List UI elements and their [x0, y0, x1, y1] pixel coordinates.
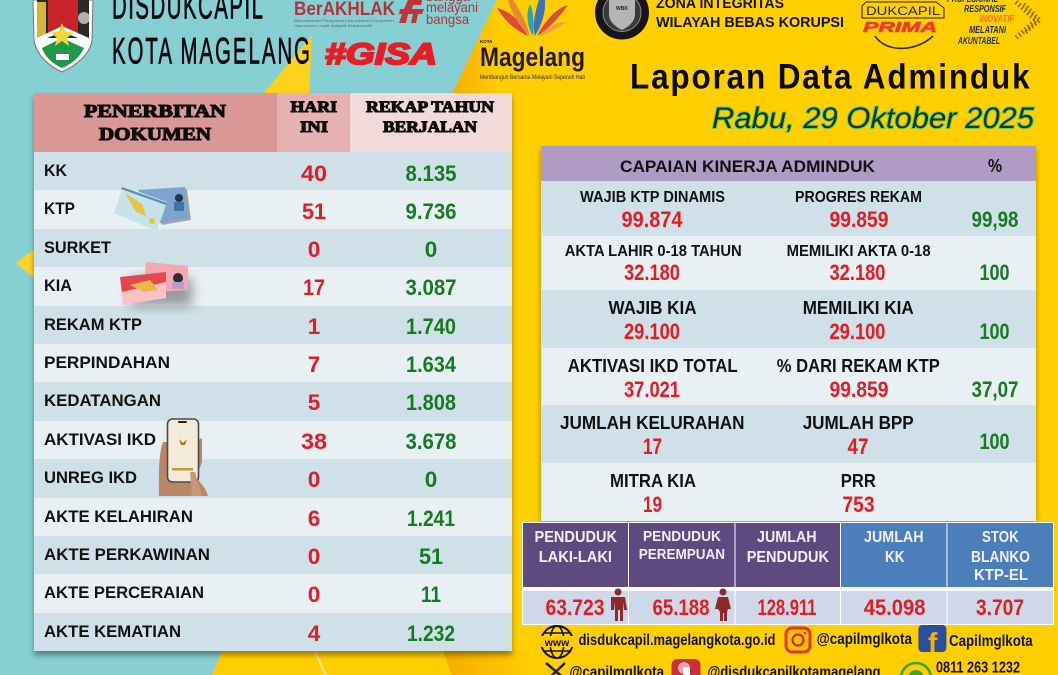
- row: KEDATANGAN: KEDATANGAN: [44, 391, 161, 410]
- logo: service values: INOVATIF: [980, 13, 1014, 25]
- row: KK: KK: [44, 161, 68, 180]
- column: jumlah penduduk: JUMLAH: [757, 529, 817, 546]
- row: AKTE PERKAWINAN: AKTE PERKAWINAN: [44, 545, 210, 564]
- row: aktivasi IKD total: % DARI REKAM KTP: [777, 356, 940, 376]
- row: KTP: 9.736: [406, 199, 456, 224]
- row: aktivasi IKD total: 37,07: [972, 377, 1018, 402]
- logo: Magelang: KOTA: [480, 39, 493, 44]
- row: PERPINDAHAN: 1.634: [406, 352, 456, 377]
- table header: BERJALAN: [383, 119, 477, 136]
- logo: city crest: [33, 0, 93, 72]
- icon: phone in hand: [159, 419, 208, 496]
- column: stok blanko: BLANKO: [971, 549, 1030, 566]
- row: aktivasi IKD total: 37.021: [624, 377, 680, 402]
- column: jumlah penduduk: 128.911: [758, 595, 816, 620]
- row: mitra KIA and PRR: [541, 463, 1036, 521]
- row: AKTIVASI IKD: 3.678: [406, 429, 456, 454]
- row: KIA: 17: [303, 275, 325, 300]
- row: KIA: KIA: [44, 276, 72, 295]
- row: aktivasi IKD total: AKTIVASI IKD TOTAL: [568, 356, 738, 376]
- column: jumlah penduduk: PENDUDUK: [747, 549, 829, 566]
- row: kelurahan and BPP: 47: [848, 434, 868, 459]
- row: PERPINDAHAN: 7: [308, 352, 320, 377]
- row: AKTE KELAHIRAN: [34, 498, 512, 536]
- column: penduduk laki-laki: [523, 523, 628, 624]
- row: KK: [34, 152, 512, 190]
- row: AKTIVASI IKD: AKTIVASI IKD: [44, 430, 156, 449]
- row: AKTE PERKAWINAN: [34, 536, 512, 574]
- row: KTP: KTP: [44, 199, 75, 218]
- row: kelurahan and BPP: 100: [980, 429, 1010, 454]
- row: KTP dinamis: WAJIB KTP DINAMIS: [580, 189, 725, 206]
- logo: Dukcapil Prima: [862, 2, 944, 48]
- row: KTP dinamis: 99,98: [972, 207, 1018, 232]
- row: AKTE KELAHIRAN: AKTE KELAHIRAN: [44, 507, 193, 526]
- logo: service values: [947, 0, 1040, 47]
- title: Laporan Data Adminduk: [630, 58, 1030, 97]
- text: Zona Integritas: WILAYAH BEBAS KORUPSI: [656, 14, 844, 31]
- panel header: %: [988, 156, 1002, 176]
- row: AKTE PERCERAIAN: [34, 574, 512, 613]
- row: AKTE KEMATIAN: 1.232: [407, 621, 455, 646]
- text: Zona Integritas: [656, 0, 844, 31]
- row: AKTE PERKAWINAN: 0: [308, 544, 320, 569]
- column: penduduk laki-laki: PENDUDUK: [534, 529, 617, 546]
- row: AKTIVASI IKD: 38: [301, 429, 327, 454]
- row: UNREG IKD: UNREG IKD: [44, 468, 137, 487]
- logo: bangga melayani bangsa: [399, 0, 478, 27]
- text: instagram handle: @capilmglkota: [817, 631, 912, 648]
- icon: whatsapp: [901, 663, 931, 675]
- row: UNREG IKD: [34, 459, 512, 498]
- row: REKAM KTP: 1: [308, 314, 320, 339]
- logo: service values: MELATANI: [969, 24, 1007, 36]
- row: KTP dinamis: 99.859: [830, 207, 888, 232]
- logo: Zona Integritas badge: [595, 0, 649, 40]
- row: KTP: 51: [302, 199, 326, 224]
- row: mitra KIA and PRR: MITRA KIA: [610, 471, 696, 491]
- column: jumlah KK: 45.098: [864, 595, 925, 620]
- column: stok blanko: [948, 523, 1053, 624]
- icon: facebook: f: [928, 627, 938, 658]
- icon: female: [715, 588, 731, 621]
- logo: Zona Integritas badge: WBK: [616, 6, 628, 12]
- row: KIA: MEMILIKI KIA: [803, 298, 914, 318]
- row: akta lahir: 32.180: [624, 260, 680, 285]
- column: stok blanko: KTP-EL: [974, 567, 1028, 584]
- row: KTP: [34, 190, 512, 229]
- icon: instagram: [786, 628, 810, 652]
- table header: REKAP TAHUN: [366, 99, 494, 116]
- panel header: CAPAIAN KINERJA ADMINDUK: [620, 157, 876, 176]
- row: mitra KIA and PRR: 19: [643, 492, 662, 517]
- row: AKTE KEMATIAN: AKTE KEMATIAN: [44, 622, 181, 641]
- logo: BerAKHLAK: Harmonis Loyal Adaptif Kolaboratif: [294, 23, 373, 28]
- icon: male: [611, 588, 627, 621]
- row: akta lahir: MEMILIKI AKTA 0-18: [787, 243, 931, 260]
- panel: capaian kinerja adminduk: [541, 146, 1036, 522]
- column: jumlah KK: [841, 523, 946, 624]
- row: KEDATANGAN: 5: [308, 390, 320, 415]
- table header: HARI: [290, 99, 337, 116]
- row: REKAM KTP: 1.740: [406, 314, 456, 339]
- logo: #GISA: #GISA: [325, 38, 437, 71]
- row: SURKET: [34, 229, 512, 267]
- row: akta lahir: [541, 236, 1036, 290]
- row: kelurahan and BPP: JUMLAH KELURAHAN: [560, 413, 744, 433]
- heading: agency name: [112, 0, 310, 72]
- row: KK: 8.135: [406, 161, 456, 186]
- row: mitra KIA and PRR: PRR: [841, 471, 876, 491]
- row: KIA: 100: [980, 319, 1010, 344]
- row: AKTE PERCERAIAN: 11: [421, 582, 441, 607]
- icon: facebook: [918, 625, 946, 658]
- column: penduduk perempuan: [629, 523, 734, 624]
- table header: INI: [300, 119, 328, 136]
- logo: Dukcapil Prima: DUKCAPIL: [866, 4, 940, 18]
- row: mitra KIA and PRR: 753: [842, 492, 874, 517]
- row: AKTE KELAHIRAN: 1.241: [407, 506, 455, 531]
- column: penduduk perempuan: PEREMPUAN: [639, 546, 725, 563]
- column: penduduk perempuan: 65.188: [652, 595, 710, 620]
- column: stok blanko: STOK: [982, 529, 1019, 546]
- row: PERPINDAHAN: PERPINDAHAN: [44, 353, 170, 372]
- row: KIA: 29.100: [624, 319, 680, 344]
- column: jumlah penduduk: [736, 523, 840, 624]
- row: KEDATANGAN: [34, 382, 512, 421]
- row: AKTE KEMATIAN: 4: [308, 621, 321, 646]
- row: AKTE PERCERAIAN: 0: [308, 582, 320, 607]
- logo: BerAKHLAK: Berorientasi Pelayanan Akuntabel Kompeten: [294, 18, 394, 23]
- logo: Dukcapil Prima: PRIMA: [863, 19, 937, 36]
- text: facebook page: Capilmglkota: [949, 633, 1033, 650]
- panel: penerbitan dokumen table: [34, 93, 512, 655]
- icon: globe: www: [544, 637, 570, 649]
- row: KK: 40: [301, 161, 327, 186]
- row: AKTE PERKAWINAN: 51: [419, 544, 443, 569]
- icon: KTP cards: [114, 186, 191, 231]
- logo: bangga melayani bangsa: bangsa: [426, 11, 469, 27]
- panel header: [541, 146, 1036, 181]
- date: Rabu, 29 Oktober 2025: [712, 102, 1034, 135]
- row: KEDATANGAN: 1.808: [406, 390, 456, 415]
- heading: agency name: KOTA MAGELANG: [112, 31, 310, 72]
- row: SURKET: 0: [308, 237, 320, 262]
- row: SURKET: 0: [425, 237, 437, 262]
- text: website: disdukcapil.magelangkota.go.id: [578, 632, 776, 649]
- column: jumlah KK: KK: [885, 549, 905, 566]
- row: KTP dinamis: 99.874: [622, 207, 683, 232]
- row: AKTE PERCERAIAN: AKTE PERCERAIAN: [44, 583, 204, 602]
- row: KIA: WAJIB KIA: [608, 298, 696, 318]
- icon: globe: [540, 626, 574, 658]
- row: REKAM KTP: REKAM KTP: [44, 315, 142, 334]
- table header: PENERBITAN: [84, 101, 226, 121]
- column: penduduk laki-laki: LAKI-LAKI: [539, 549, 612, 566]
- footer: contact links: [540, 625, 1033, 675]
- panel: population summary: [522, 522, 1054, 625]
- row: aktivasi IKD total: [541, 348, 1036, 405]
- row: KTP dinamis: [541, 181, 1036, 236]
- row: AKTE KELAHIRAN: 6: [308, 506, 320, 531]
- logo: service values: AKUNTABEL: [957, 35, 1000, 47]
- logo: BerAKHLAK: [294, 0, 395, 28]
- row: REKAM KTP: [34, 306, 512, 344]
- table header: [34, 93, 512, 152]
- row: akta lahir: 100: [980, 260, 1010, 285]
- row: KIA: [34, 267, 512, 306]
- row: akta lahir: 32.180: [830, 260, 886, 285]
- icon: X: [546, 663, 566, 675]
- row: KTP dinamis: PROGRES REKAM: [795, 189, 922, 206]
- row: aktivasi IKD total: 99.859: [830, 377, 888, 402]
- table header: DOKUMEN: [99, 124, 211, 144]
- logo: Magelang: Magelang: [480, 42, 585, 72]
- logo: Magelang: Membangun Bersama Melayani Sepenuh Hati: [480, 75, 585, 81]
- row: kelurahan and BPP: 17: [643, 434, 662, 459]
- row: UNREG IKD: 0: [425, 467, 437, 492]
- icon: KIA cards: [120, 262, 192, 306]
- column: stok blanko: 3.707: [976, 595, 1024, 620]
- row: SURKET: SURKET: [44, 238, 112, 257]
- row: PERPINDAHAN: [34, 344, 512, 382]
- row: AKTIVASI IKD: [34, 421, 512, 459]
- row: kelurahan and BPP: [541, 405, 1036, 463]
- row: KIA: 29.100: [830, 319, 886, 344]
- icon: instagram style badge: [672, 659, 700, 675]
- logo: Magelang: [480, 0, 585, 81]
- row: kelurahan and BPP: JUMLAH BPP: [803, 413, 914, 433]
- column: jumlah KK: JUMLAH: [864, 529, 924, 546]
- row: UNREG IKD: 0: [308, 467, 320, 492]
- icon: yellow diamond: [16, 249, 34, 278]
- row: KIA: 3.087: [406, 275, 456, 300]
- logo: service values: RESPONSIF: [964, 3, 1006, 15]
- column: penduduk perempuan: PENDUDUK: [643, 528, 721, 545]
- column: penduduk laki-laki: 63.723: [546, 595, 604, 620]
- row: AKTE KEMATIAN: [34, 613, 512, 651]
- row: KIA: [541, 290, 1036, 348]
- row: akta lahir: AKTA LAHIR 0-18 TAHUN: [565, 243, 742, 260]
